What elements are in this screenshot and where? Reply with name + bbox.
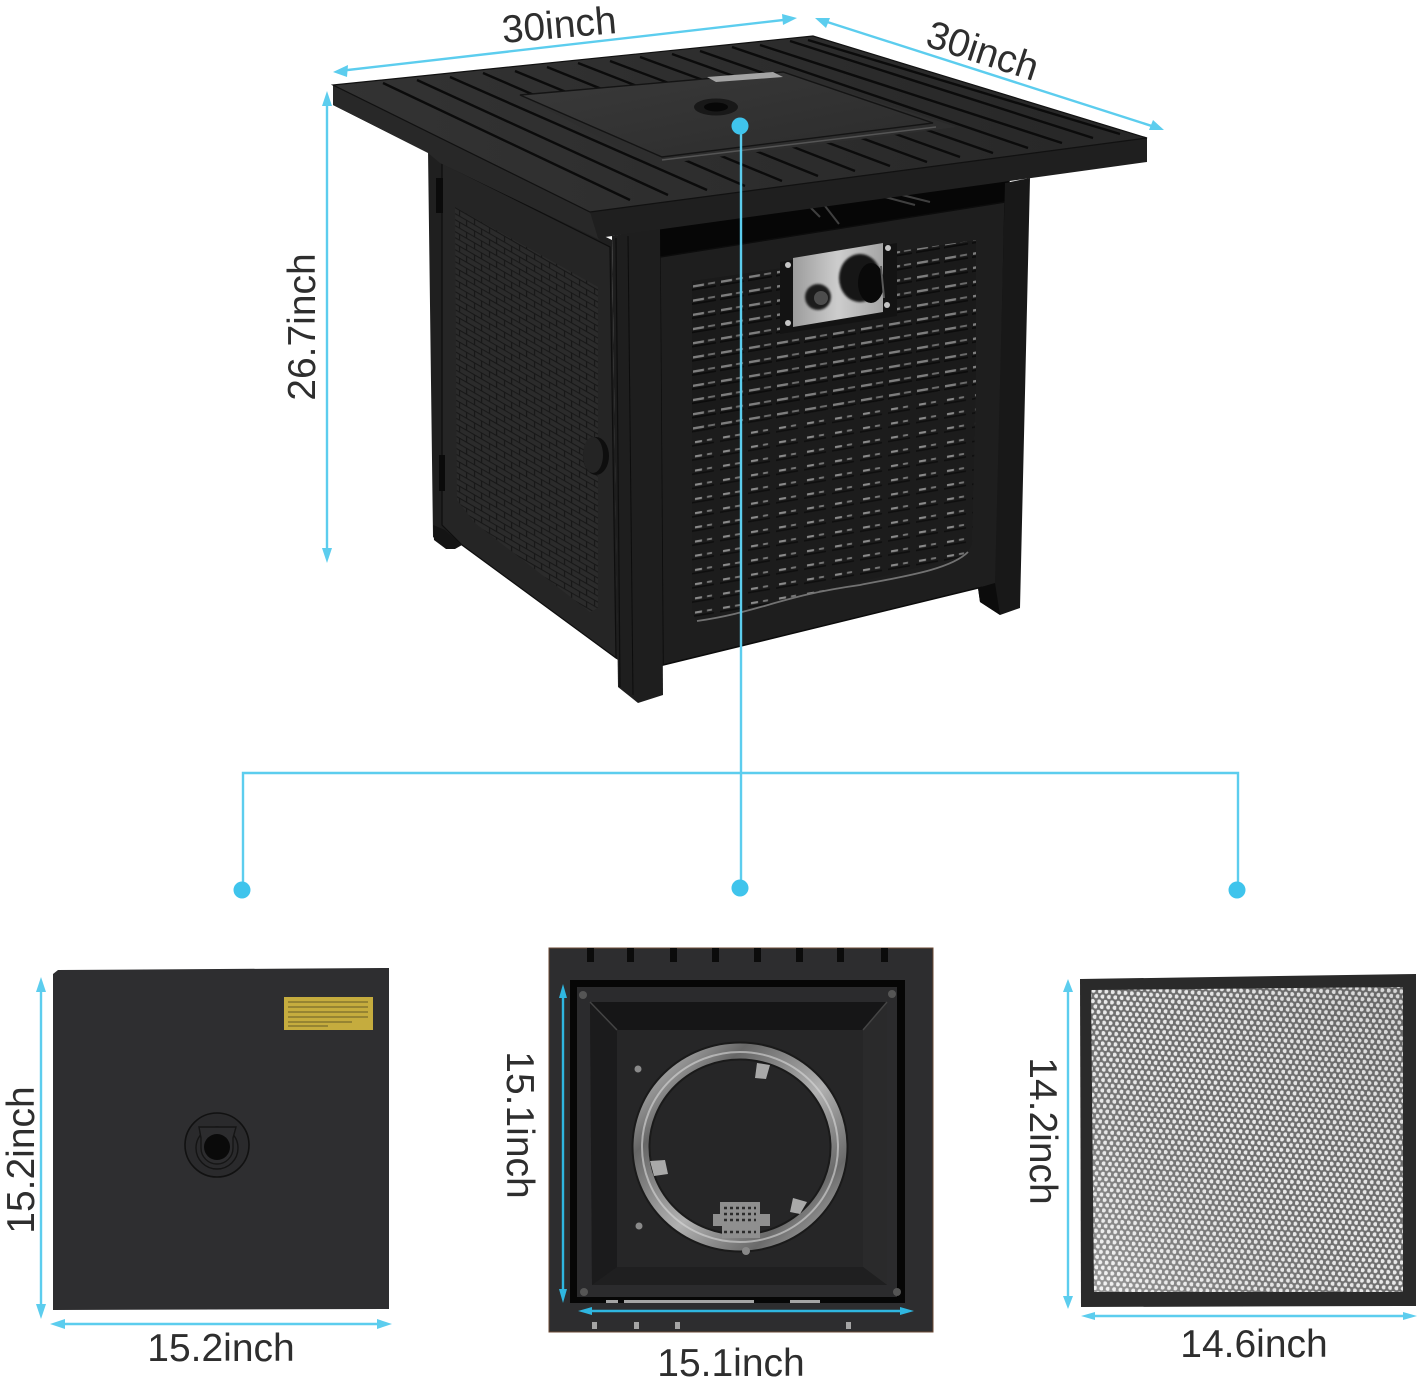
bowl depth dimension [498,984,567,1303]
front right leg [978,178,1030,615]
burner ring [641,1051,839,1255]
lid width dimension [50,1319,392,1370]
label: 30inch right: 30inch [921,13,1044,90]
panel: burner bowl [549,948,933,1332]
lid depth dimension [0,977,46,1319]
label: 14.6inch: 14.6inch [1180,1323,1328,1366]
label: 26.7inch: 26.7inch [281,253,324,401]
table top lid with burner cover [520,72,957,165]
mesh width dimension [1081,1312,1417,1366]
depth dimension top right [815,13,1164,130]
panel: mesh screen [1080,974,1416,1307]
table top with slats [333,36,1147,240]
connector lines to component views [234,118,1246,898]
label: 14.2inch: 14.2inch [1021,1057,1064,1205]
panel: lid underside [53,968,389,1310]
control panel with knob and igniter [780,243,897,334]
warning label [284,997,373,1030]
mesh depth dimension [1021,979,1073,1309]
wicker upper area [692,240,976,432]
front panel and legs [612,178,1030,703]
height dimension [281,91,332,563]
bottom edge marks [592,1300,851,1329]
label: 15.2inch horizontal: 15.2inch [147,1327,295,1370]
bowl width dimension [578,1307,914,1380]
top edge slots [587,948,888,962]
label: 15.1inch vertical: 15.1inch [498,1051,541,1199]
fire pit table product photo [333,36,1147,703]
tray [590,1002,887,1285]
label: 15.2inch vertical: 15.2inch [0,1086,43,1234]
label: 30inch left: 30inch [500,0,618,52]
mounting screws [579,990,901,1296]
front left leg [612,228,663,703]
left side wall [428,150,618,660]
width dimension top left [333,0,797,77]
wicker lower area [692,385,976,622]
recess [570,980,905,1303]
burner gap below rim [650,180,1010,262]
lid center fitting [185,1113,249,1177]
